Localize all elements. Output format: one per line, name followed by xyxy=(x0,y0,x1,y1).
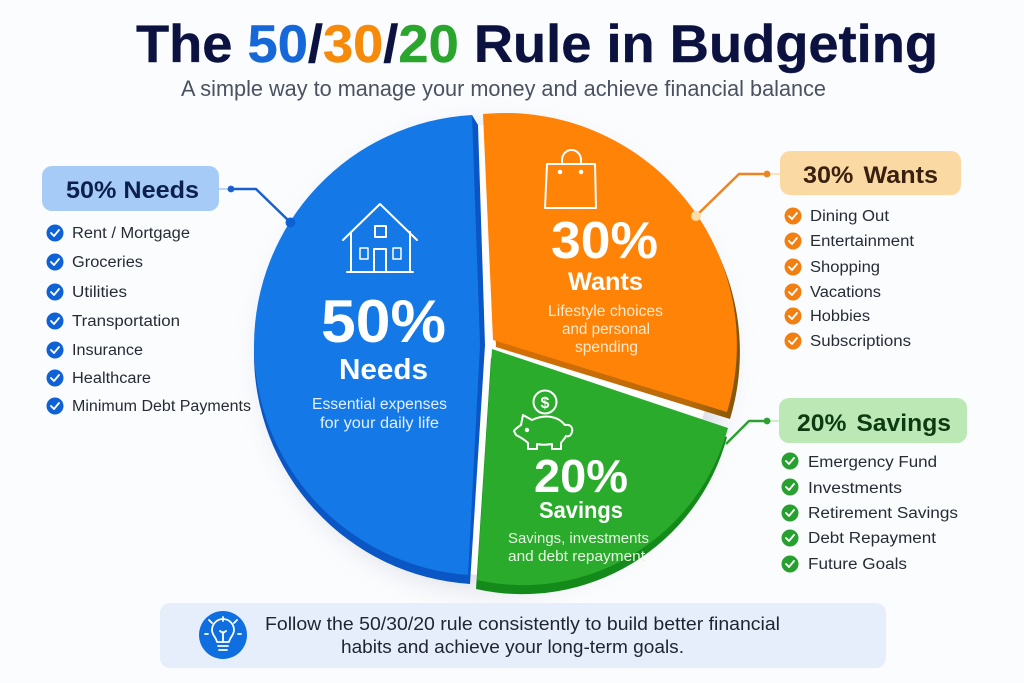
subtitle: A simple way to manage your money and achieve financial balance xyxy=(181,76,826,101)
icon: shopping bag xyxy=(545,150,596,208)
title: The 50/30/20 Rule in Budgeting xyxy=(136,15,938,74)
panel: needs list xyxy=(42,166,251,415)
wants item: dining out: Dining Out xyxy=(810,208,890,225)
panel: savings list xyxy=(779,398,967,573)
savings item: debt repayment: Debt Repayment xyxy=(808,530,937,547)
icon: piggy bank xyxy=(514,390,572,449)
wants description: and personal xyxy=(562,321,650,338)
needs item: utilities: Utilities xyxy=(72,284,127,301)
footer text: Follow the 50/30/20 rule consistently to build better financial xyxy=(265,614,780,634)
wants heading: 30% Wants xyxy=(803,162,938,189)
pie gap backing xyxy=(263,125,713,575)
panel: footer tip xyxy=(160,603,886,668)
needs item: minimum debt payments: Minimum Debt Payments xyxy=(72,398,251,415)
needs label: Needs xyxy=(339,354,428,386)
savings item: retirement savings: Retirement Savings xyxy=(808,505,958,522)
wants heading box xyxy=(780,151,961,195)
wants description: spending xyxy=(575,339,638,356)
savings percentage: 20% xyxy=(534,450,628,502)
savings item: future goals: Future Goals xyxy=(808,556,907,573)
savings slice face xyxy=(477,349,728,585)
panel: wants list xyxy=(780,151,961,350)
wants item: shopping xyxy=(784,258,880,276)
needs item: transportation: Transportation xyxy=(72,313,180,330)
needs percentage: 50% xyxy=(321,288,446,355)
wants slice face xyxy=(483,113,737,412)
savings description: Savings, investments xyxy=(508,530,649,547)
wants item: shopping: Shopping xyxy=(810,259,880,276)
needs item: insurance xyxy=(46,342,143,359)
wants item: hobbies xyxy=(784,308,870,325)
wants description: Lifestyle choices xyxy=(548,303,663,320)
savings label: Savings xyxy=(539,497,623,523)
footer text: habits and achieve your long-term goals. xyxy=(341,637,684,657)
connector: savings xyxy=(726,418,779,444)
footer background xyxy=(160,603,886,668)
needs description: for your daily life xyxy=(320,415,439,432)
savings item: investments: Investments xyxy=(808,480,902,497)
wants label: Wants xyxy=(568,268,643,296)
footer text xyxy=(265,614,780,657)
needs slice face xyxy=(254,115,480,575)
needs item: healthcare: Healthcare xyxy=(72,370,151,387)
savings item: future goals xyxy=(782,556,907,573)
connector: needs xyxy=(219,186,296,228)
needs item: groceries xyxy=(46,254,143,271)
panel: needs slice xyxy=(254,115,485,584)
panel: wants slice xyxy=(483,113,740,419)
savings description xyxy=(508,530,649,565)
needs item: utilities xyxy=(46,284,127,301)
needs description: Essential expenses xyxy=(312,396,447,413)
needs item: healthcare xyxy=(46,370,151,387)
wants percentage: 30% xyxy=(551,212,658,270)
needs item: insurance: Insurance xyxy=(72,342,143,359)
wants item: vacations xyxy=(784,284,881,301)
icon: light bulb xyxy=(199,611,247,659)
panel: savings slice xyxy=(476,349,728,594)
needs description xyxy=(312,396,447,432)
savings item: investments xyxy=(782,478,902,497)
savings heading: 20% Savings xyxy=(797,410,951,437)
wants item: entertainment: Entertainment xyxy=(810,233,915,250)
needs slice side xyxy=(254,115,485,584)
needs item: groceries: Groceries xyxy=(72,254,143,271)
needs item: rent: Rent / Mortgage xyxy=(72,225,190,242)
needs heading: 50% Needs xyxy=(66,177,199,204)
pie shadow xyxy=(263,126,727,590)
wants item: subscriptions: Subscriptions xyxy=(810,333,911,350)
connector: wants xyxy=(691,171,780,221)
coin dollar sign: $ xyxy=(541,395,550,412)
wants slice side xyxy=(486,120,740,419)
wants item: dining out xyxy=(784,208,890,225)
wants description xyxy=(548,303,663,356)
savings item: emergency fund xyxy=(782,452,937,471)
savings slice side xyxy=(476,358,727,594)
savings description: and debt repayment xyxy=(508,548,646,565)
savings item: emergency fund: Emergency Fund xyxy=(808,454,937,471)
wants item: vacations: Vacations xyxy=(810,284,881,301)
wants item: hobbies: Hobbies xyxy=(810,308,870,325)
savings heading box xyxy=(779,398,967,443)
icon: house xyxy=(343,204,417,272)
needs heading box xyxy=(42,166,219,211)
